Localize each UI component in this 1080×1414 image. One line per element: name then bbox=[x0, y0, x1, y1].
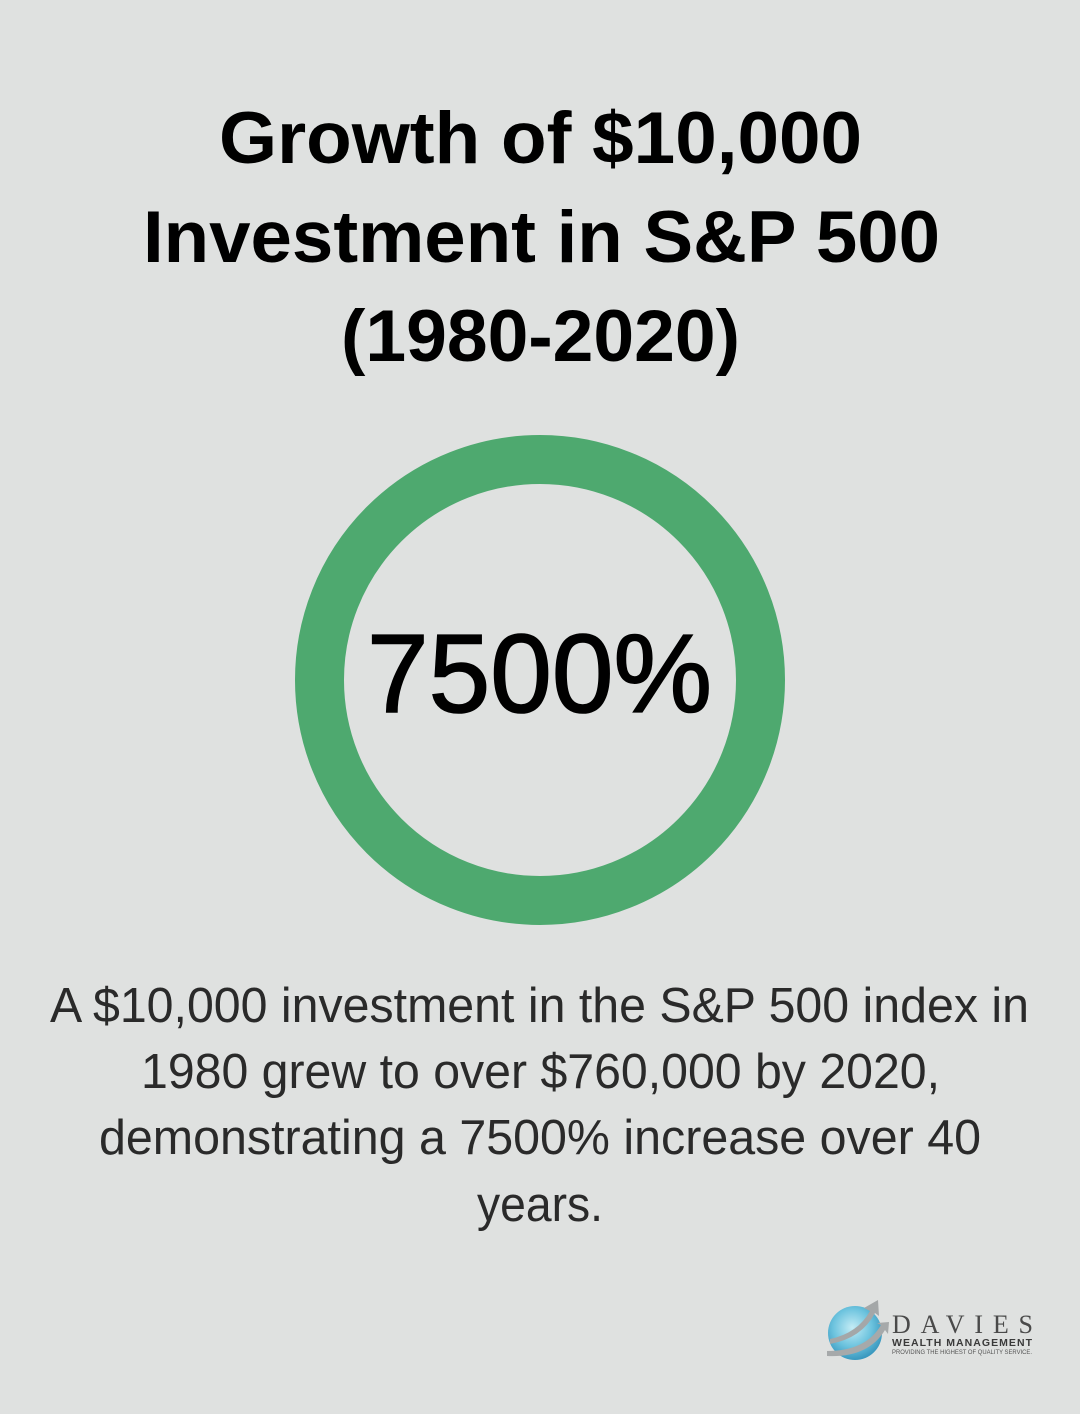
title: Growth of $10,000 bbox=[219, 98, 862, 179]
donut ring bbox=[320, 460, 760, 900]
tagline: PROVIDING THE HIGHEST OF QUALITY SERVICE. bbox=[892, 1349, 1032, 1356]
wordmark: DAVIES bbox=[892, 1310, 1033, 1339]
logo: Davies Wealth Management bbox=[827, 1300, 1033, 1360]
icon: globe with arrows bbox=[827, 1300, 889, 1360]
wordmark subtitle: WEALTH MANAGEMENT bbox=[892, 1337, 1033, 1349]
title bbox=[143, 98, 940, 377]
title: Investment in S&P 500 bbox=[143, 197, 940, 278]
description text: 1980 grew to over $760,000 by 2020, bbox=[141, 1045, 940, 1099]
description text: years. bbox=[477, 1178, 603, 1232]
title: (1980-2020) bbox=[341, 296, 740, 377]
description text: A $10,000 investment in the S&P 500 index in bbox=[50, 979, 1029, 1033]
big percentage: 7500% bbox=[367, 612, 712, 736]
description text bbox=[50, 979, 1029, 1232]
description text: demonstrating a 7500% increase over 40 bbox=[99, 1111, 981, 1165]
